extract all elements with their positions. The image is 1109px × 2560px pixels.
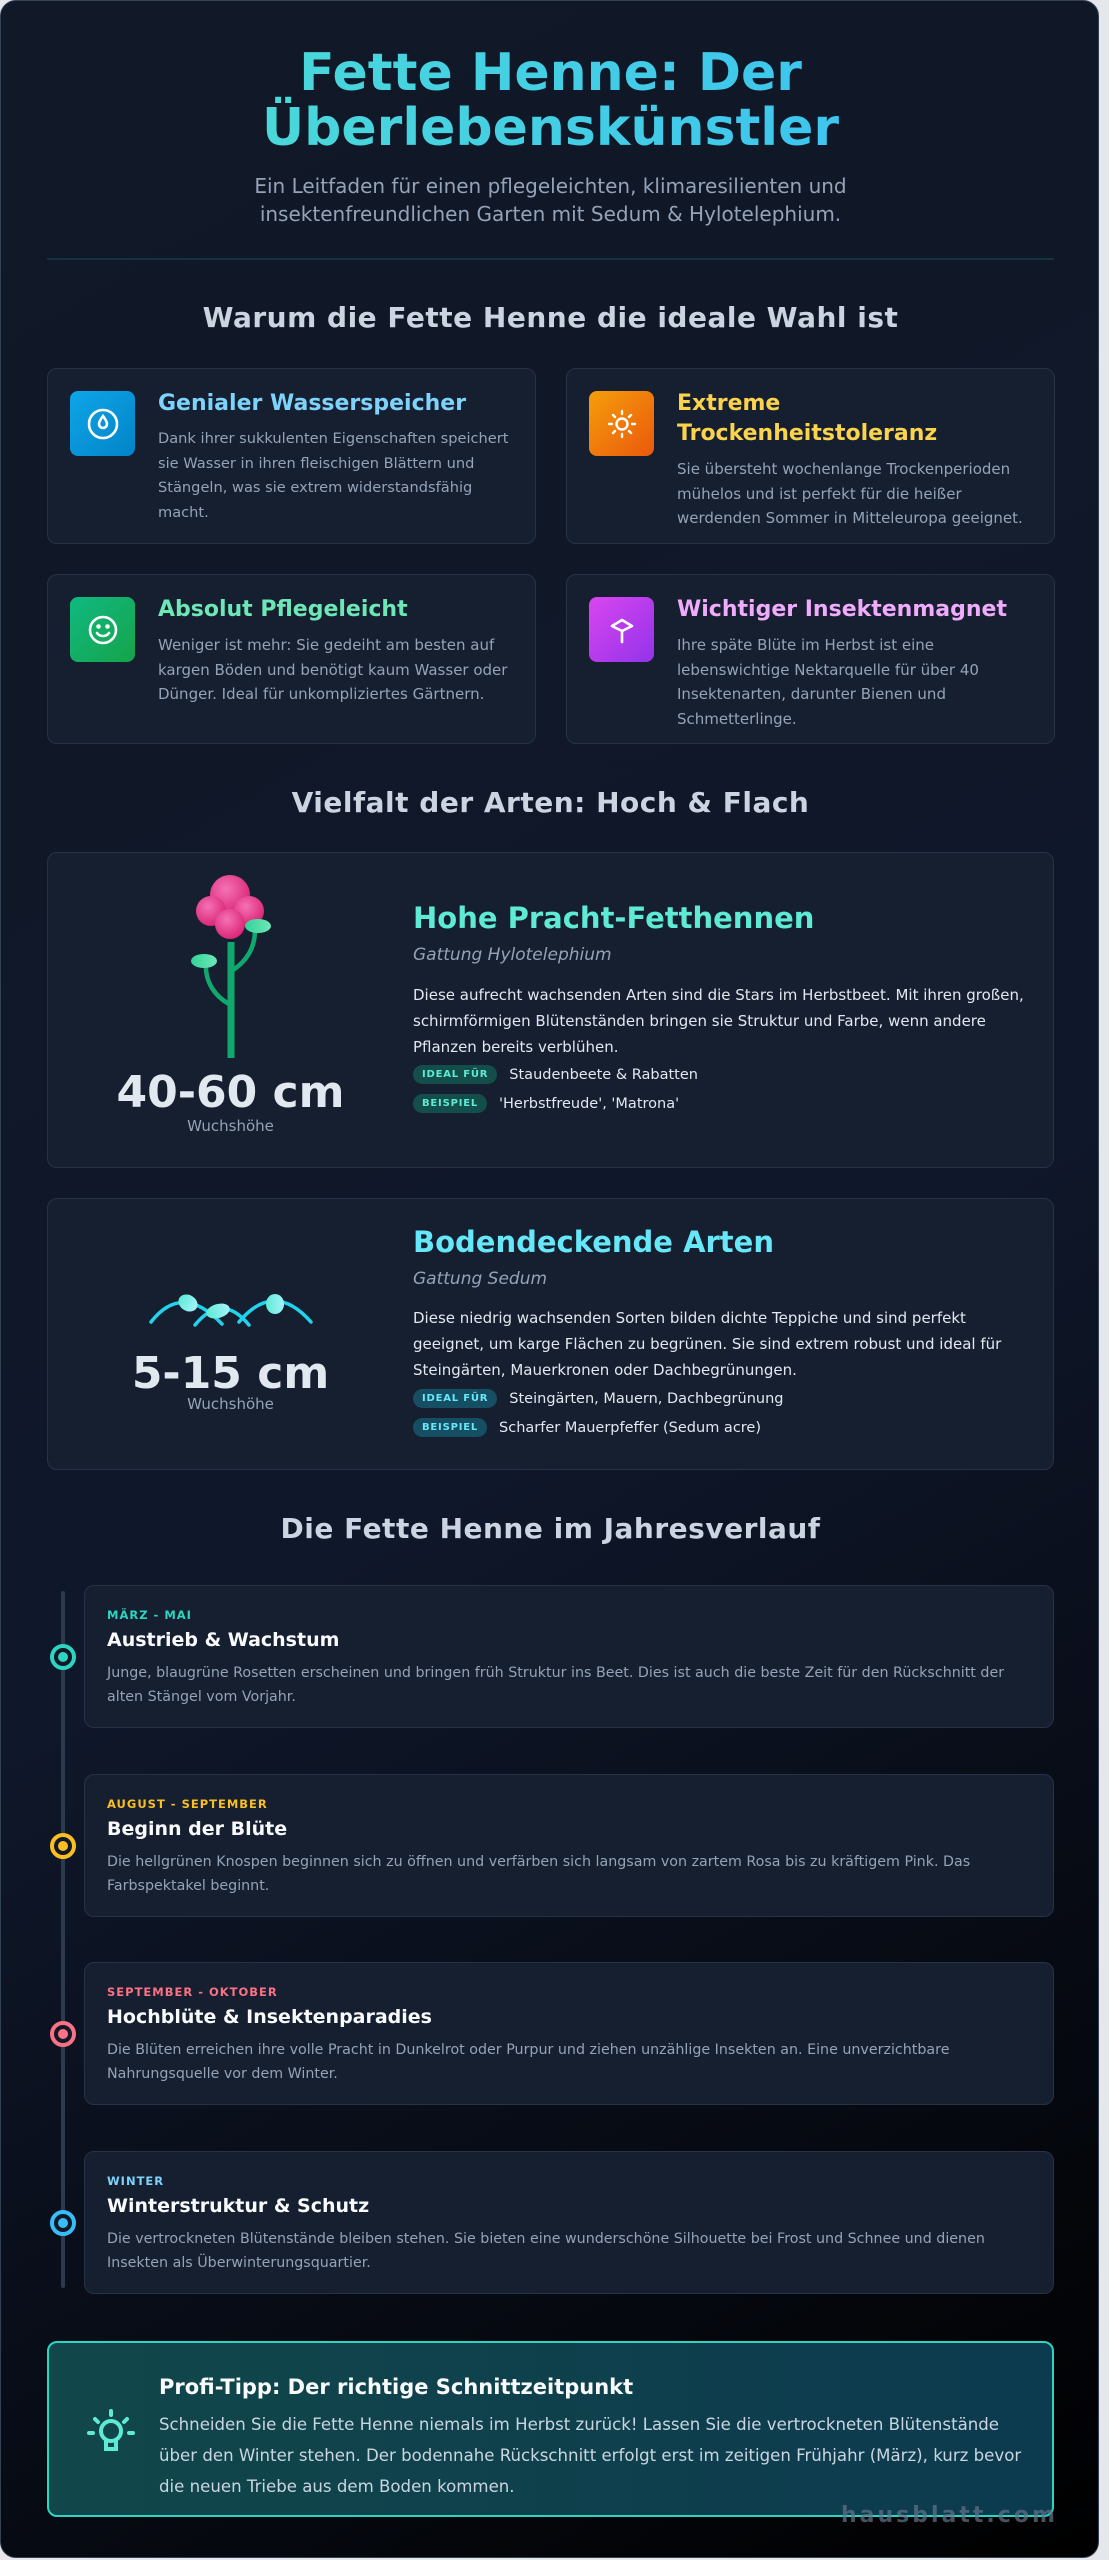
icon: light bulb	[87, 2409, 135, 2451]
panel: ground cover: Wuchshöhe	[187, 1395, 274, 1413]
timeline item: full bloom: Hochblüte & Insektenparadies	[107, 2006, 432, 2028]
timeline	[50, 1591, 76, 2288]
icon: tall flower	[191, 875, 271, 1058]
tags: IDEAL FÜR	[422, 1393, 488, 1404]
timeline item: winter: Die vertrockneten Blütenstände bleiben stehen. Sie bieten eine wunderschöne Silhouette bei Frost und Schnee und dienen	[107, 2231, 985, 2247]
tags: Staudenbeete & Rabatten	[509, 1066, 698, 1082]
panel: tall species: BEISPIEL	[422, 1098, 478, 1109]
subtitle	[254, 174, 847, 226]
timeline dot 1	[50, 1644, 76, 1670]
timeline item: full bloom: Die Blüten erreichen ihre volle Pracht in Dunkelrot oder Purpur und ziehen unzählige Insekten an. Eine unverzichtbare	[107, 2042, 949, 2058]
panel: ground cover	[47, 1198, 1054, 1470]
timeline item: spring: MÄRZ - MAI	[107, 1608, 192, 1622]
icon: water drop	[70, 391, 135, 456]
subtitle: Ein Leitfaden für einen pflegeleichten, klimaresilienten und	[254, 174, 847, 198]
timeline item: winter	[84, 2151, 1054, 2294]
panel title: Hohe Pracht-Fetthennen	[413, 901, 814, 935]
callout: pro tip: Profi-Tipp: Der richtige Schnittzeitpunkt	[159, 2375, 633, 2399]
card: insect magnet: Ihre späte Blüte im Herbst ist eine lebenswichtige Nektarquelle für über 40 Insektenarten, darunter Bienen und Schmetterlinge.	[677, 636, 979, 728]
tags: Steingärten, Mauern, Dachbegrünung	[509, 1390, 783, 1406]
timeline item: bloom start: Farbspektakel beginnt.	[107, 1878, 269, 1894]
callout: pro tip: Schneiden Sie die Fette Henne niemals im Herbst zurück! Lassen Sie die vertrockneten Blütenstände über den Winter stehen. Der bodennahe Rückschnitt erfolgt erst im zeitigen Frühjahr (März), kurz bevor die neuen Triebe aus dem Boden kommen.	[159, 2415, 1021, 2496]
icon: ground cover	[149, 1294, 313, 1327]
timeline dot 2	[50, 1833, 76, 1859]
timeline item: full bloom: SEPTEMBER - OKTOBER	[107, 1985, 278, 1999]
timeline item: winter: WINTER	[107, 2174, 164, 2188]
card: easy care	[47, 574, 536, 744]
card: drought: Sie übersteht wochenlange Trockenperioden mühelos und ist perfekt für die heißer werdenden Sommer in Mitteleuropa geeignet.	[677, 460, 1023, 527]
panel: ground cover: Scharfer Mauerpfeffer (Sedum acre)	[499, 1420, 761, 1436]
card: easy care: Absolut Pflegeleicht	[158, 597, 408, 622]
card: drought: Extreme	[677, 391, 780, 416]
panel: ground cover: Diese niedrig wachsenden Sorten bilden dichte Teppiche und sind perfekt geeignet, um karge Flächen zu begrünen. Sie sind extrem robust und ideal für Steingärten, Mauerkronen oder Dachbegrünungen.	[413, 1309, 1001, 1379]
watermark: hausblatt.com	[841, 2503, 1058, 2528]
card: water storage: Genialer Wasserspeicher	[158, 391, 466, 416]
panel title: Bodendeckende Arten	[413, 1225, 774, 1259]
panel: tall species: Diese aufrecht wachsenden Arten sind die Stars im Herbstbeet. Mit ihren großen, schirmförmigen Blütenständen bringen sie Struktur und Farbe, wenn andere Pflanzen bereits verblühen.	[413, 986, 1024, 1056]
title: Fette Henne: Der	[299, 43, 802, 103]
heading: variety: Vielfalt der Arten: Hoch & Flach	[292, 786, 809, 819]
timeline item: spring: Junge, blaugrüne Rosetten erscheinen und bringen früh Struktur ins Beet. Dies ist auch die beste Zeit für den Rückschnitt der	[107, 1665, 1004, 1681]
title: Überlebenskünstler	[262, 98, 839, 158]
panel: ground cover: Gattung Sedum	[413, 1269, 547, 1289]
timeline item: bloom start	[84, 1774, 1054, 1917]
panel: tall species: Wuchshöhe	[187, 1117, 274, 1135]
panel: tall species	[47, 852, 1054, 1168]
tags: IDEAL FÜR	[422, 1069, 488, 1080]
card: insect magnet: Wichtiger Insektenmagnet	[677, 597, 1007, 622]
panel: tall species: 'Herbstfreude', 'Matrona'	[499, 1096, 679, 1112]
timeline item: spring	[84, 1585, 1054, 1728]
panel: ground cover: BEISPIEL	[422, 1422, 478, 1433]
card: drought: Trockenheitstoleranz	[677, 421, 937, 446]
icon: umbrella flower	[589, 597, 654, 662]
icon: sun	[589, 391, 654, 456]
timeline item: winter: Winterstruktur & Schutz	[107, 2195, 369, 2217]
timeline item: winter: Insekten als Überwinterungsquartier.	[107, 2255, 371, 2271]
tags	[413, 1065, 698, 1084]
card: insect magnet	[566, 574, 1055, 744]
panel: tall species: Gattung Hylotelephium	[413, 945, 612, 965]
timeline dot 4	[50, 2210, 76, 2236]
heading: timeline: Die Fette Henne im Jahresverlauf	[280, 1512, 820, 1545]
timeline dot 3	[50, 2021, 76, 2047]
timeline item: bloom start: Die hellgrünen Knospen beginnen sich zu öffnen und verfärben sich langsam von zartem Rosa bis zu kräftigem Pink. Das	[107, 1854, 970, 1870]
panel: ground cover: 5-15 cm	[132, 1348, 329, 1399]
timeline item: bloom start: Beginn der Blüte	[107, 1818, 287, 1840]
timeline item: spring: alten Stängel vom Vorjahr.	[107, 1689, 296, 1705]
tags	[413, 1389, 783, 1408]
callout: pro tip	[47, 2341, 1054, 2517]
panel: tall species: 40-60 cm	[116, 1067, 344, 1118]
timeline item: bloom start: AUGUST - SEPTEMBER	[107, 1797, 268, 1811]
timeline item: full bloom: Nahrungsquelle vor dem Winter.	[107, 2066, 338, 2082]
timeline item: spring: Austrieb & Wachstum	[107, 1629, 339, 1651]
card: water storage: Dank ihrer sukkulenten Eigenschaften speichert sie Wasser in ihren fleischigen Blättern und Stängeln, was sie extrem widerstandsfähig macht.	[158, 430, 508, 520]
icon: smiley	[70, 597, 135, 662]
card: water storage	[47, 368, 536, 544]
heading: why: Warum die Fette Henne die ideale Wahl ist	[203, 301, 898, 334]
timeline item: full bloom	[84, 1962, 1054, 2105]
title	[1, 46, 1100, 156]
card: easy care: Weniger ist mehr: Sie gedeiht am besten auf kargen Böden und benötigt kaum Wasser oder Dünger. Ideal für unkompliziertes Gärtnern.	[158, 636, 507, 703]
card: drought	[566, 368, 1055, 544]
subtitle: insektenfreundlichen Garten mit Sedum & Hylotelephium.	[260, 202, 841, 226]
